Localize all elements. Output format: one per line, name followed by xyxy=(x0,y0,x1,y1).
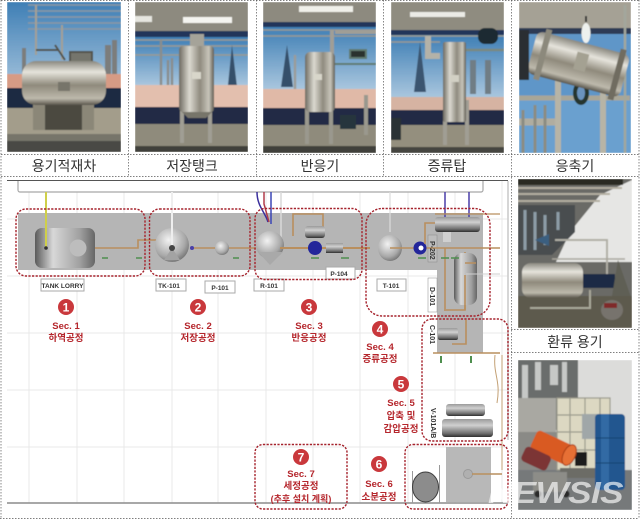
section 5 compressor and receivers xyxy=(433,320,502,470)
section 2 label: 2 xyxy=(195,300,202,314)
caption: condenser: 응축기 xyxy=(556,158,594,174)
caption: reactor: 반응기 xyxy=(301,158,339,174)
section 6 label xyxy=(362,456,396,503)
section 3 label xyxy=(292,299,326,344)
photo: lorry tank vessel xyxy=(7,2,121,152)
caption: distillation tower: 증류탑 xyxy=(428,158,466,174)
equipment tag labels xyxy=(41,241,436,438)
photo: condenser xyxy=(519,2,631,153)
watermark: NEWSIS xyxy=(488,475,624,510)
caption: lorry tank: 용기적재차 xyxy=(32,158,96,174)
section 6 filling equipment xyxy=(412,447,502,503)
tag: P-104: P-104 xyxy=(330,271,348,278)
photo: reflux vessel xyxy=(518,179,632,328)
section 3 label: 반응공정 xyxy=(292,332,326,344)
section 1 label: Sec. 1 xyxy=(52,321,80,332)
tag: P-101 xyxy=(205,281,235,293)
tag: R-101: R-101 xyxy=(260,283,278,290)
section 5 label: 압축 및 xyxy=(387,410,416,422)
section 7 label: (추후 설치 계획) xyxy=(271,493,331,504)
tag: tank lorry xyxy=(41,279,84,291)
section 1 tank lorry equipment xyxy=(35,192,162,268)
tag: TK-101 xyxy=(156,279,186,291)
tag: P-202: P-202 xyxy=(428,241,435,260)
section 2 storage tank equipment xyxy=(155,192,256,262)
photo: storage tank xyxy=(135,2,248,152)
tag: C-101: C-101 xyxy=(428,325,435,344)
tag: T-101 xyxy=(377,279,406,291)
tag: R-101 xyxy=(254,279,284,291)
section outline boxes xyxy=(16,208,508,509)
section 7 label: 세정공정 xyxy=(284,480,318,492)
section 4 label: Sec. 4 xyxy=(366,342,394,353)
caption: storage tank: 저장탱크 xyxy=(166,158,218,174)
tag: P-101: P-101 xyxy=(211,285,229,292)
caption: reflux vessel: 환류 용기 xyxy=(547,334,603,350)
section 3 label: 3 xyxy=(306,300,313,314)
section 1 label xyxy=(49,299,83,344)
section 7 label xyxy=(271,449,331,504)
section 6 label: Sec. 6 xyxy=(365,479,393,490)
section 2 label xyxy=(181,299,215,344)
tag: P-104 xyxy=(326,267,355,279)
caption row xyxy=(32,158,603,350)
photo: reactor xyxy=(263,2,376,153)
tag: TK-101: TK-101 xyxy=(158,283,180,290)
section 2 label: Sec. 2 xyxy=(184,321,212,332)
section 4 label: 증류공정 xyxy=(363,354,397,365)
photo: distillation tower xyxy=(391,2,504,153)
process schematic xyxy=(7,180,508,509)
section 3 reactor equipment xyxy=(256,214,370,265)
section 2 label: 저장공정 xyxy=(181,332,215,344)
section 4 distillation equipment xyxy=(378,214,500,311)
section 4 label xyxy=(363,321,397,365)
tag: V-101 A/B: V-101A/B xyxy=(429,408,436,438)
section 4 label: 4 xyxy=(377,322,384,336)
section 6 label: 소분공정 xyxy=(362,492,396,503)
section 5 label: Sec. 5 xyxy=(387,398,415,409)
photo: drums and tote xyxy=(518,360,632,510)
section 6 label: 6 xyxy=(376,458,383,472)
section 7 label: 7 xyxy=(298,450,305,464)
tag: tank lorry: TANK LORRY xyxy=(42,283,84,290)
tag: D-101: D-101 xyxy=(428,287,435,306)
section 5 label: 5 xyxy=(398,378,405,392)
section 3 label: Sec. 3 xyxy=(295,321,323,332)
tag: T-101: T-101 xyxy=(383,283,400,290)
section 1 label: 하역공정 xyxy=(49,332,83,344)
section 7 label: Sec. 7 xyxy=(287,469,315,480)
section 1 label: 1 xyxy=(63,300,70,314)
section 5 label xyxy=(384,376,418,435)
section 5 label: 감압공정 xyxy=(384,423,418,435)
